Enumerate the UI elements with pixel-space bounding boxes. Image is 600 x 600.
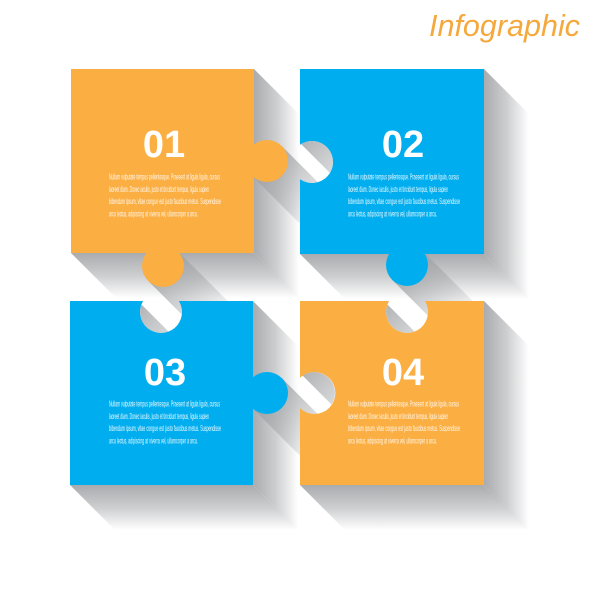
long shadow: piece 02 bottom [300,254,529,299]
long shadow: piece 04 right [484,301,529,530]
long shadow: piece 04 bottom [300,485,529,530]
long shadow: piece 03 right [253,301,298,530]
text block 04: arcu lectus, adipiscing at viverra vel, ullamcorper a arcu. [348,435,437,445]
panel: puzzle piece 04: laoreet diam. Donec iaculis, justo et tincidunt tempus, ligula sapien [348,411,448,421]
number 04: 04 [382,352,424,394]
text block 03 [109,398,221,445]
long shadow: piece 01 right knob [252,146,347,241]
panel: puzzle piece 02: laoreet diam. Donec iaculis, justo et tincidunt tempus, ligula sapien [348,184,448,194]
panel: puzzle piece 01: laoreet diam. Donec iaculis, justo et tincidunt tempus, ligula sapien [109,184,209,194]
number 01: 01 [143,124,185,166]
panel: puzzle piece 02 [300,69,526,316]
notch shadow: piece 02 [301,141,333,173]
notch shadow: piece 03 [140,304,168,333]
number 02: 02 [382,124,424,166]
long shadow: piece 02 right [484,69,529,299]
long shadow: piece 01 bottom [71,253,299,298]
panel: puzzle piece 03 [70,301,318,526]
panel: puzzle piece 03: Nullam vulputate tempus pellentesque. Praesent at ligula ligula, cursus [109,398,220,408]
long shadow: piece 03 bottom [70,485,298,530]
panel: puzzle piece 01 [71,69,347,346]
long shadow: piece 01 right [254,69,299,298]
long shadow: piece 03 right knob [252,378,347,473]
notch shadow: piece 04 top [386,304,414,333]
panel: puzzle piece 04 [300,301,526,526]
long shadow: piece 02 bottom knob [392,250,487,345]
number 03: 03 [144,352,186,394]
text block 04 [348,398,460,445]
title: Infographic [429,9,580,43]
notch shadow: piece 04 left [302,372,335,404]
text block 01 [109,172,221,218]
piece 03 shape [70,301,288,485]
piece 02 shape [300,69,484,286]
panel: puzzle piece 01: Nullam vulputate tempus pellentesque. Praesent at ligula ligula, cursus [109,172,220,182]
piece 04 shape [300,301,484,485]
text block 02 [348,172,460,218]
text block 03: arcu lectus, adipiscing at viverra vel, ullamcorper a arcu. [109,435,198,445]
panel: puzzle piece 03: bibendum ipsum, vitae congue est justo faucibus metus. Suspendisse [109,423,221,433]
piece 01 shape [71,69,288,287]
panel: puzzle piece 01: bibendum ipsum, vitae congue est justo faucibus metus. Suspendisse [109,196,221,206]
text block 01: arcu lectus, adipiscing at viverra vel, ullamcorper a arcu. [109,208,198,218]
panel: puzzle piece 03: laoreet diam. Donec iaculis, justo et tincidunt tempus, ligula sapien [109,411,209,421]
text block 02: arcu lectus, adipiscing at viverra vel, ullamcorper a arcu. [348,208,437,218]
long shadow: piece 01 bottom knob [148,251,243,346]
